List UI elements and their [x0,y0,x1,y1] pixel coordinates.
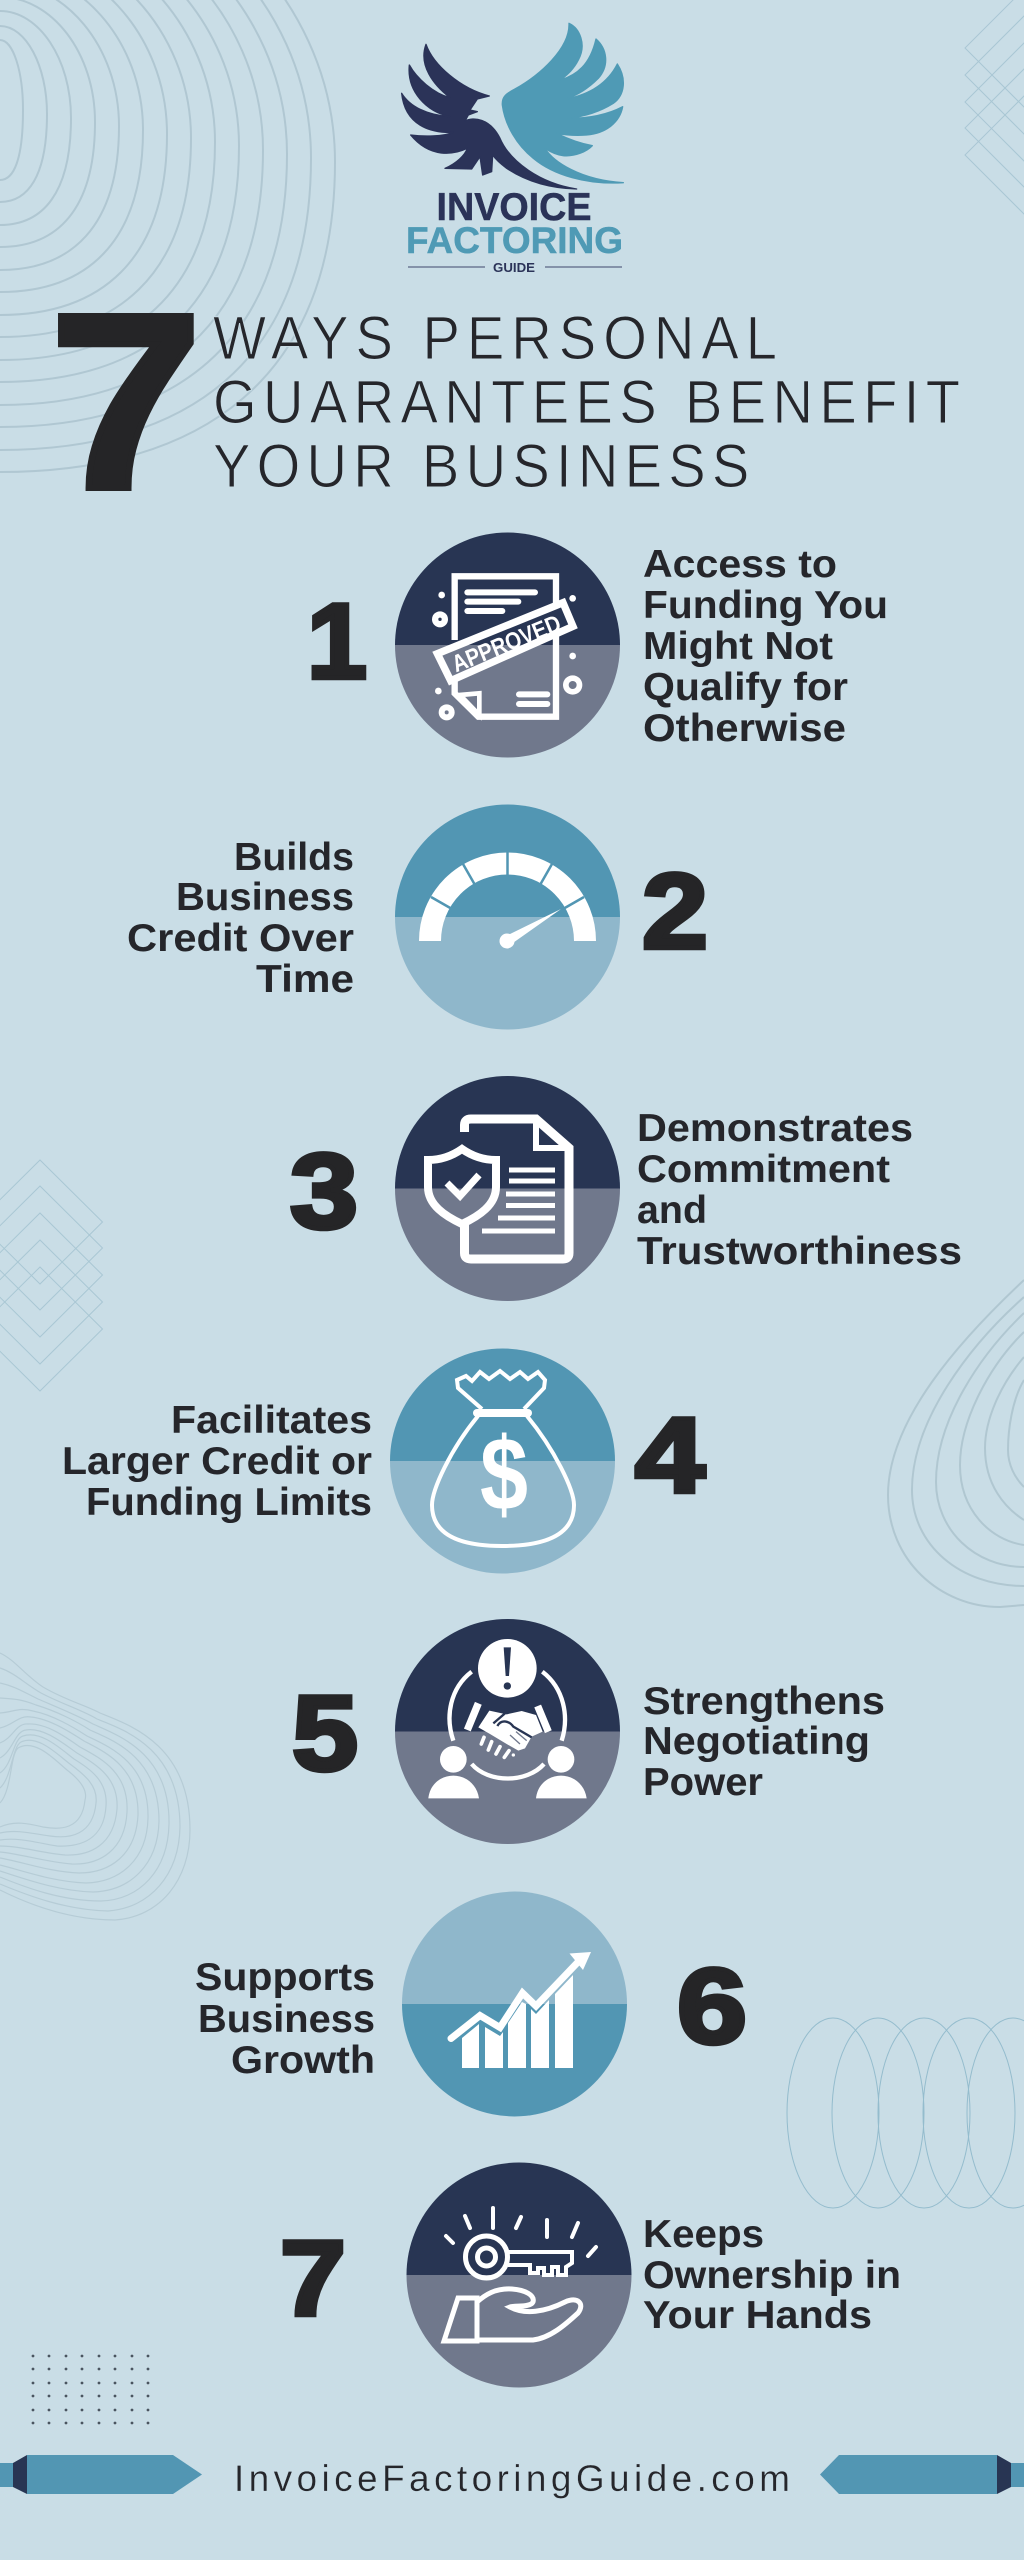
text: Supports Business Growth: Supports [195,1956,375,1999]
icon circle: money bag [390,1348,615,1574]
text: Strengthens Negotiating [643,1680,885,1804]
footer [0,2455,1024,2499]
logo wordmark: GUIDE: GUIDE [493,260,535,275]
number 1: 1 [307,581,367,701]
text: Strengthens Negotiating: Negotiating [643,1720,870,1763]
text: Builds Business Credit: Time [256,958,354,1001]
title text: WAYS PERSONAL [213,305,777,373]
text: Demonstrates Commitment: Trustworthiness [637,1230,962,1273]
text: Demonstrates Commitment: Commitment [637,1148,890,1191]
item 1 [307,532,888,758]
title [50,262,960,541]
text: Access to Funding: Qualify for [643,666,848,709]
item 3 [290,1076,962,1301]
icon circle: document with shield [395,1076,620,1301]
icon circle: approved document [395,532,620,758]
text: Demonstrates Commitment [637,1107,962,1273]
right banner [820,2455,1024,2494]
item 6 [195,1892,747,2116]
text: Keeps Ownership [643,2213,901,2337]
number 2: 2 [642,851,708,971]
text: Supports Business Growth: Growth [231,2039,375,2082]
logo: Invoice Factoring Guide [402,23,623,275]
text: Demonstrates Commitment: and [637,1189,707,1232]
text: Builds Business Credit [127,836,354,1001]
text: Access to Funding: Otherwise [643,707,846,750]
text: Facilitates Larger Credit: Facilitates [171,1399,372,1442]
icon circle: approved document: APPROVED [448,610,565,678]
title text: GUARANTEES BENEFIT [213,369,960,437]
icon circle: gauge [395,805,620,1030]
text: Strengthens Negotiating: Strengthens [643,1680,885,1723]
text: Facilitates Larger Credit [62,1399,372,1524]
number 5: 5 [292,1673,358,1793]
item 5 [292,1619,885,1844]
number 3: 3 [290,1131,358,1251]
text: Supports Business Growth: Business [198,1998,375,2041]
text: Keeps Ownership: Keeps [643,2213,764,2256]
title text [213,305,960,501]
big numeral 7: 7 [50,262,202,541]
text: Access to Funding: Might Not [643,625,833,668]
text: Supports Business Growth [195,1956,375,2082]
icon circle: key and hand [406,2162,632,2388]
item 4 [62,1348,705,1574]
text: Demonstrates Commitment: Demonstrates [637,1107,913,1150]
number 4: 4 [635,1395,705,1515]
text: Builds Business Credit: Builds [234,836,354,879]
number 7: 7 [280,2218,346,2338]
text: Keeps Ownership: Your Hands [643,2294,872,2337]
text: Builds Business Credit: Business [176,876,354,919]
icon: eagle [402,23,623,189]
text: Access to Funding: Access to [643,543,837,586]
text: Builds Business Credit: Credit Over [127,917,354,960]
text: Facilitates Larger Credit: Funding Limits [86,1481,372,1524]
icon circle: money bag: $ [480,1417,528,1533]
icon circle: growth chart [402,1892,627,2116]
item 2 [127,805,708,1030]
text: Facilitates Larger Credit: Larger Credit or [62,1440,372,1483]
text: Keeps Ownership: Ownership in [643,2254,901,2297]
left banner [0,2455,202,2494]
text: Access to Funding: Funding You [643,584,888,627]
text: Access to Funding [643,543,888,750]
title text: YOUR BUSINESS [213,433,749,501]
number 6: 6 [677,1946,747,2066]
text: Strengthens Negotiating: Power [643,1761,763,1804]
website url: InvoiceFactoringGuide.com [234,2458,790,2499]
item 7 [280,2162,901,2388]
logo wordmark: FACTORING: FACTORING [406,220,623,261]
logo wordmark: INVOICE: INVOICE [436,186,592,229]
icon circle: handshake [395,1619,620,1844]
